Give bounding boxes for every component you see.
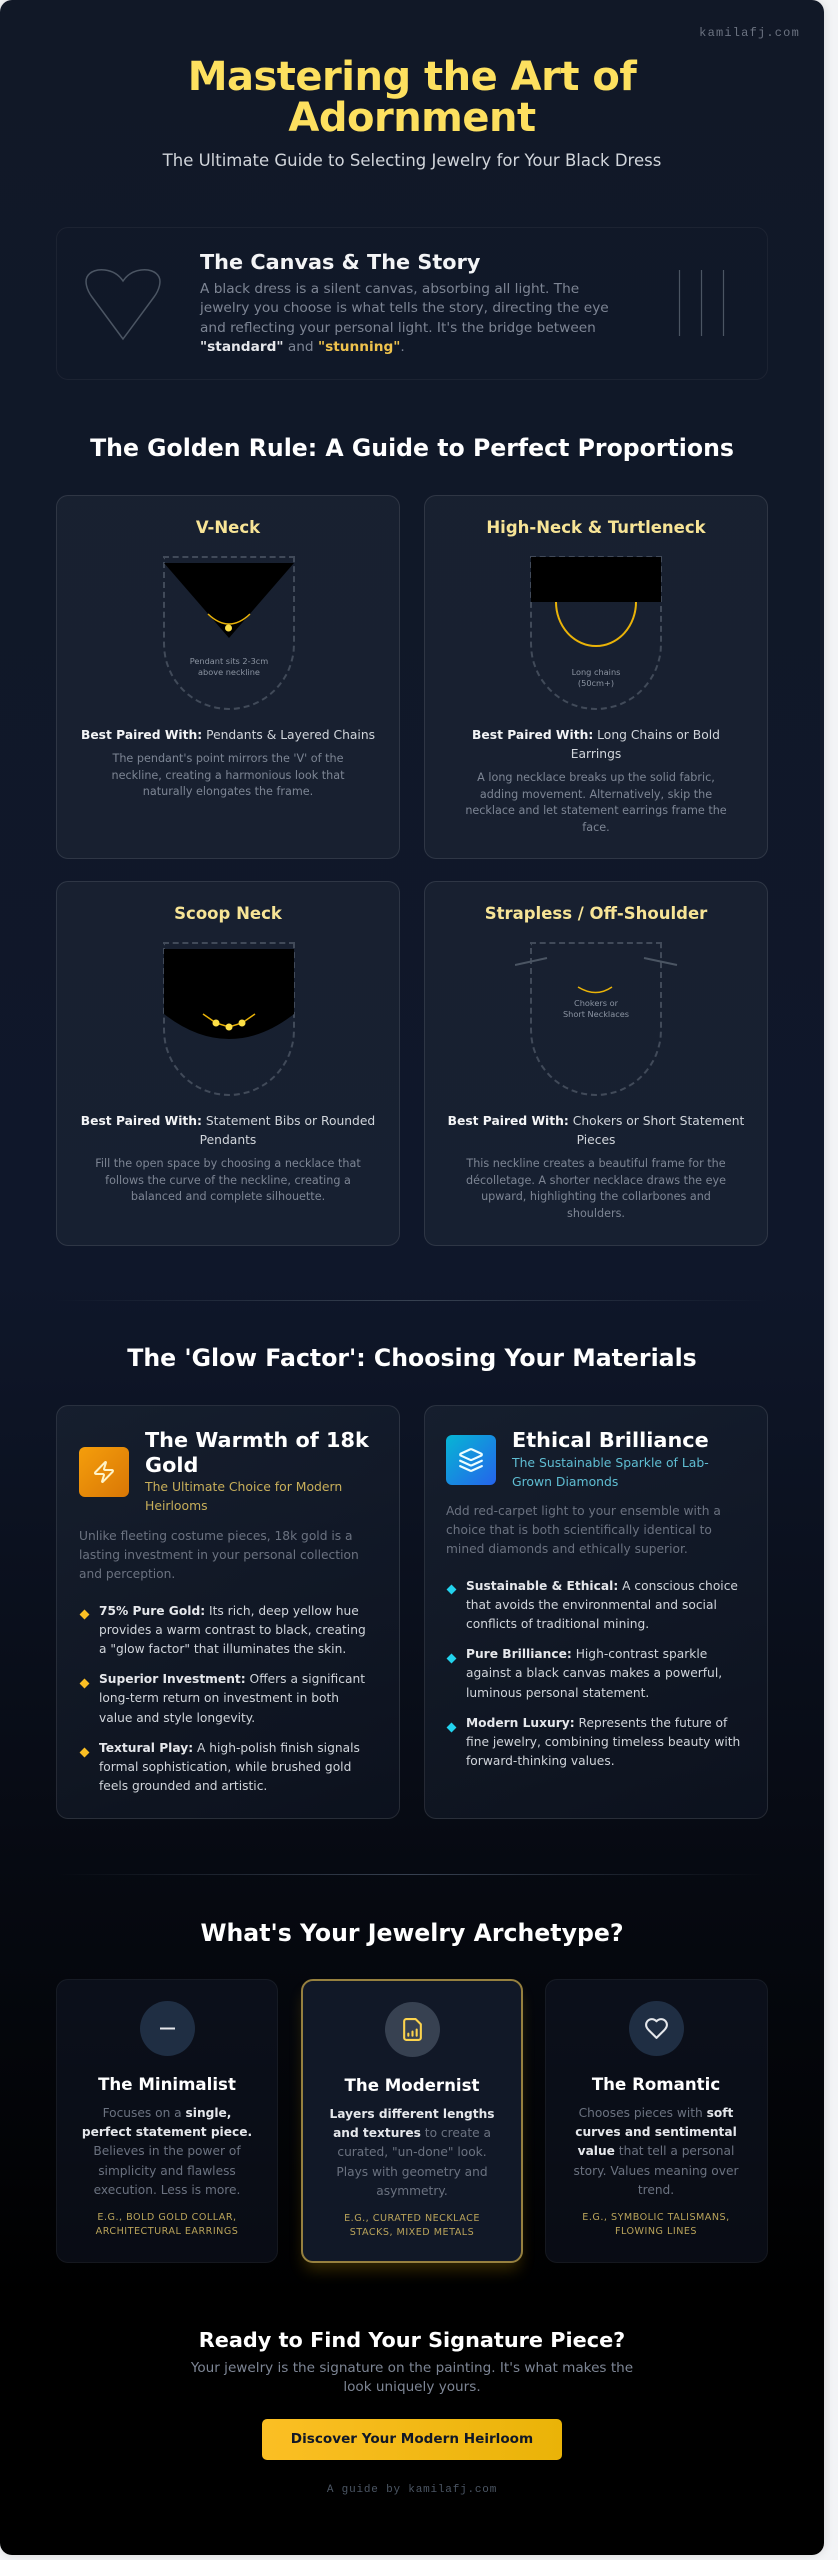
- archetype name: The Modernist: [345, 2076, 479, 2095]
- description: [465, 771, 727, 834]
- heading: Ethical Brilliance: [512, 1428, 709, 1452]
- bullet: textural play: Textural Play: A high-polish finish signals: [99, 1741, 360, 1755]
- bullet: textural play: formal sophistication, while brushed gold: [99, 1760, 351, 1774]
- panel: strapless: [424, 881, 768, 1246]
- best paired with: [448, 1114, 744, 1147]
- caption: (50cm+): [578, 678, 614, 688]
- description: curated, "un-done" look.: [337, 2145, 487, 2159]
- example: [96, 2212, 238, 2237]
- description: trend.: [638, 2183, 674, 2197]
- bullet: modern luxury: [466, 1716, 740, 1768]
- necklace drawing: [164, 563, 294, 638]
- subheading: [144, 1479, 342, 1513]
- panel: scoop neck: [56, 881, 400, 1246]
- bullet: sustainable and ethical: [466, 1578, 738, 1631]
- intro text: mined diamonds and ethically superior.: [446, 1542, 688, 1556]
- text: canvas description: [200, 281, 609, 355]
- heading: glow factor: The 'Glow Factor': Choosing Your Materials: [127, 1344, 697, 1372]
- text: call to action: [0, 2359, 824, 2398]
- panel: the canvas and the story: [56, 227, 768, 380]
- heading: Gold: [145, 1452, 198, 1476]
- bullet: pure gold: a "glow factor" that illuminates the skin.: [99, 1642, 346, 1656]
- icon: minus in circle: [140, 2001, 195, 2056]
- description: A long necklace breaks up the solid fabric,: [477, 771, 715, 784]
- subheading: Grown Diamonds: [512, 1474, 618, 1489]
- caption: Long chains: [572, 667, 620, 677]
- example: [344, 2213, 480, 2238]
- description: and textures to create a: [333, 2126, 491, 2140]
- description: neckline, creating a harmonious look that: [112, 768, 344, 782]
- bullet: superior investment: [99, 1672, 365, 1724]
- bullet: sustainable and ethical: that avoids the environmental and social: [466, 1598, 717, 1612]
- bullet marker: [80, 1609, 89, 1619]
- bullet: pure brilliance: luminous personal statement.: [466, 1686, 649, 1700]
- best paired with: Pendants: [200, 1133, 256, 1147]
- description: necklace and let statement earrings frame the: [465, 804, 727, 817]
- bullet: pure brilliance: [466, 1647, 722, 1700]
- caption: Chokers or: [574, 998, 618, 1008]
- panel: the minimalist: [56, 1979, 278, 2263]
- description: adding movement. Alternatively, skip the: [480, 788, 712, 800]
- diagram: high-neck: [530, 556, 662, 710]
- bullet list: [80, 1604, 366, 1793]
- bullet: sustainable and ethical: conflicts of traditional mining.: [466, 1617, 649, 1631]
- best paired with: Best Paired With: Chokers or Short Statement: [448, 1114, 744, 1128]
- button: discover: [262, 2419, 562, 2460]
- subheading: The Ultimate Choice for Modern: [145, 1479, 342, 1494]
- caption: [190, 656, 268, 677]
- button: discover: Discover Your Modern Heirloom: [291, 2431, 533, 2447]
- card title: Strapless / Off-Shoulder: [485, 904, 707, 923]
- best paired with: [472, 728, 720, 761]
- description: Fill the open space by choosing a necklace that: [95, 1157, 361, 1170]
- description: Believes in the power of: [93, 2144, 241, 2158]
- caption: above neckline: [198, 667, 260, 677]
- dashed outline: [163, 942, 295, 1096]
- icon: outline heart: [85, 269, 161, 340]
- description: asymmetry.: [376, 2184, 448, 2198]
- card title: Scoop Neck: [174, 904, 282, 923]
- dashed outline: [163, 556, 295, 710]
- description: This neckline creates a beautiful frame for the: [466, 1157, 726, 1170]
- panel: the romantic: [545, 1979, 768, 2263]
- description: face.: [582, 820, 610, 834]
- necklace drawing: [531, 557, 661, 647]
- description: naturally elongates the frame.: [143, 785, 313, 798]
- description: perfect statement piece.: [82, 2125, 252, 2139]
- bullet: modern luxury: forward-thinking values.: [466, 1754, 615, 1768]
- description: décolletage. A shorter necklace draws the eye: [466, 1174, 726, 1186]
- panel: the modernist: [301, 1979, 523, 2263]
- example: E.G., SYMBOLIC TALISMANS,: [582, 2212, 730, 2223]
- diagram: strapless: [515, 942, 678, 1096]
- bullet list: [446, 1578, 740, 1768]
- description: Plays with geometry and: [336, 2165, 488, 2179]
- necklace drawing: [164, 949, 294, 1039]
- best paired with: Best Paired With: Pendants & Layered Chains: [81, 728, 375, 742]
- text: canvas description: A black dress is a silent canvas, absorbing all light. The: [200, 281, 579, 297]
- title: Mastering the Art of: [188, 54, 636, 100]
- intro text: [79, 1529, 359, 1581]
- bullet: pure gold: provides a warm contrast to black, creating: [99, 1623, 366, 1637]
- example: E.G., CURATED NECKLACE: [344, 2213, 480, 2224]
- bullet: superior investment: value and style longevity.: [99, 1710, 255, 1724]
- bullet: pure gold: [99, 1604, 366, 1656]
- description: curves and sentimental: [575, 2125, 737, 2139]
- bullet marker: [447, 1653, 456, 1663]
- description: [466, 1157, 726, 1220]
- dashed outline: [530, 556, 662, 710]
- example: E.G., BOLD GOLD COLLAR,: [97, 2212, 237, 2223]
- example: [545, 2211, 767, 2238]
- bullet marker: [80, 1747, 89, 1757]
- text: canvas description: "standard" and "stunning".: [200, 339, 405, 355]
- icon: three vertical lines: [678, 270, 724, 336]
- panel: 18k gold: [56, 1405, 400, 1819]
- description: execution. Less is more.: [94, 2183, 240, 2197]
- watermark: kamilafj.com: [699, 26, 800, 40]
- icon: file chart in circle: [385, 2002, 440, 2057]
- text: canvas description: jewelry you choose is what tells the story, directing the eye: [200, 300, 609, 316]
- intro text: [446, 1504, 721, 1556]
- title: Adornment: [288, 95, 536, 141]
- heading: The Warmth of 18k: [145, 1428, 369, 1452]
- description: [95, 1157, 361, 1203]
- diagram: scoop neck: [163, 942, 295, 1096]
- diagram: v-neck: [163, 556, 295, 710]
- subtitle: The Ultimate Guide to Selecting Jewelry for Your Black Dress: [163, 151, 661, 170]
- subheading: Heirlooms: [145, 1498, 208, 1513]
- intro text: lasting investment in your personal collection: [79, 1548, 359, 1562]
- bullet marker: [447, 1722, 456, 1732]
- heading: golden rule: The Golden Rule: A Guide to Perfect Proportions: [90, 434, 734, 462]
- dashed outline: [530, 942, 662, 1096]
- description: upward, highlighting the collarbones and: [481, 1190, 711, 1203]
- text: call to action: Your jewelry is the signature on the painting. It's what makes the: [191, 2360, 633, 2376]
- description: Layers different lengths: [330, 2107, 494, 2121]
- bullet: modern luxury: fine jewelry, combining timeless beauty with: [466, 1735, 740, 1749]
- description: story. Values meaning over: [574, 2164, 738, 2178]
- caption: [572, 667, 620, 688]
- bullet: pure brilliance: Pure Brilliance: High-contrast sparkle: [466, 1647, 707, 1661]
- bullet: textural play: feels grounded and artistic.: [99, 1779, 267, 1793]
- description: follows the curve of the neckline, creating a: [105, 1174, 351, 1186]
- intro text: and perception.: [79, 1567, 175, 1581]
- necklace drawing: [515, 957, 678, 994]
- caption: [563, 998, 629, 1019]
- heading: archetype: What's Your Jewelry Archetype?: [200, 1919, 624, 1947]
- intro text: Add red-carpet light to your ensemble with a: [446, 1504, 721, 1518]
- bullet marker: [447, 1584, 456, 1594]
- example: ARCHITECTURAL EARRINGS: [96, 2226, 238, 2237]
- text: canvas description: and reflecting your personal light. It's the bridge between: [200, 320, 596, 336]
- bullet: pure brilliance: against a black canvas makes a powerful,: [466, 1666, 722, 1680]
- description: value that tell a personal: [578, 2144, 734, 2158]
- heading: [145, 1428, 370, 1476]
- best paired with: [81, 1114, 375, 1147]
- description: The pendant's point mirrors the 'V' of the: [112, 752, 344, 765]
- description: balanced and complete silhouette.: [131, 1190, 325, 1203]
- bullet: superior investment: Superior Investment: Offers a significant: [99, 1672, 365, 1686]
- description: [545, 2104, 767, 2200]
- bullet: superior investment: long-term return on investment in both: [99, 1691, 339, 1705]
- description: [112, 752, 344, 798]
- text: call to action: look uniquely yours.: [343, 2379, 481, 2395]
- description: [330, 2107, 494, 2198]
- subheading: The Sustainable Sparkle of Lab-: [512, 1455, 709, 1470]
- description: simplicity and flawless: [98, 2164, 236, 2178]
- description: Chooses pieces with soft: [579, 2106, 733, 2120]
- footer credit: A guide by kamilafj.com: [327, 2484, 497, 2496]
- best paired with: Best Paired With: Long Chains or Bold: [472, 728, 720, 742]
- bullet: textural play: [99, 1741, 360, 1793]
- card title: V-Neck: [196, 518, 260, 537]
- description: Focuses on a single,: [103, 2106, 231, 2120]
- icon: lightning: [79, 1447, 129, 1497]
- caption: Pendant sits 2-3cm: [190, 656, 268, 666]
- subheading: [512, 1455, 709, 1489]
- best paired with: Best Paired With: Statement Bibs or Rounded: [81, 1114, 375, 1128]
- heading: call to action: Ready to Find Your Signature Piece?: [199, 2328, 625, 2352]
- example: STACKS, MIXED METALS: [350, 2227, 474, 2238]
- best paired with: Earrings: [571, 747, 621, 761]
- heading: canvas: The Canvas & The Story: [200, 250, 480, 274]
- panel: v-neck: [56, 495, 400, 859]
- example: FLOWING LINES: [615, 2226, 697, 2237]
- panel: high-neck: [424, 495, 768, 859]
- bullet: modern luxury: Modern Luxury: Represents the future of: [466, 1716, 727, 1730]
- icon: heart in circle: [629, 2001, 684, 2056]
- card title: High-Neck & Turtleneck: [486, 518, 706, 537]
- title: [188, 54, 638, 141]
- panel: lab-grown diamonds: [424, 1405, 768, 1819]
- description: shoulders.: [567, 1206, 625, 1220]
- archetype name: The Romantic: [592, 2075, 720, 2094]
- archetype name: The Minimalist: [98, 2075, 236, 2094]
- intro text: choice that is both scientifically identical to: [446, 1523, 712, 1537]
- best paired with: Pieces: [577, 1133, 615, 1147]
- intro text: Unlike fleeting costume pieces, 18k gold is a: [79, 1529, 353, 1543]
- description: [82, 2106, 252, 2197]
- caption: Short Necklaces: [563, 1009, 629, 1019]
- bullet marker: [80, 1678, 89, 1688]
- bullet: sustainable and ethical: Sustainable & Ethical: A conscious choice: [466, 1578, 738, 1592]
- icon: layers: [446, 1435, 496, 1485]
- bullet: pure gold: 75% Pure Gold: Its rich, deep yellow hue: [99, 1604, 359, 1618]
